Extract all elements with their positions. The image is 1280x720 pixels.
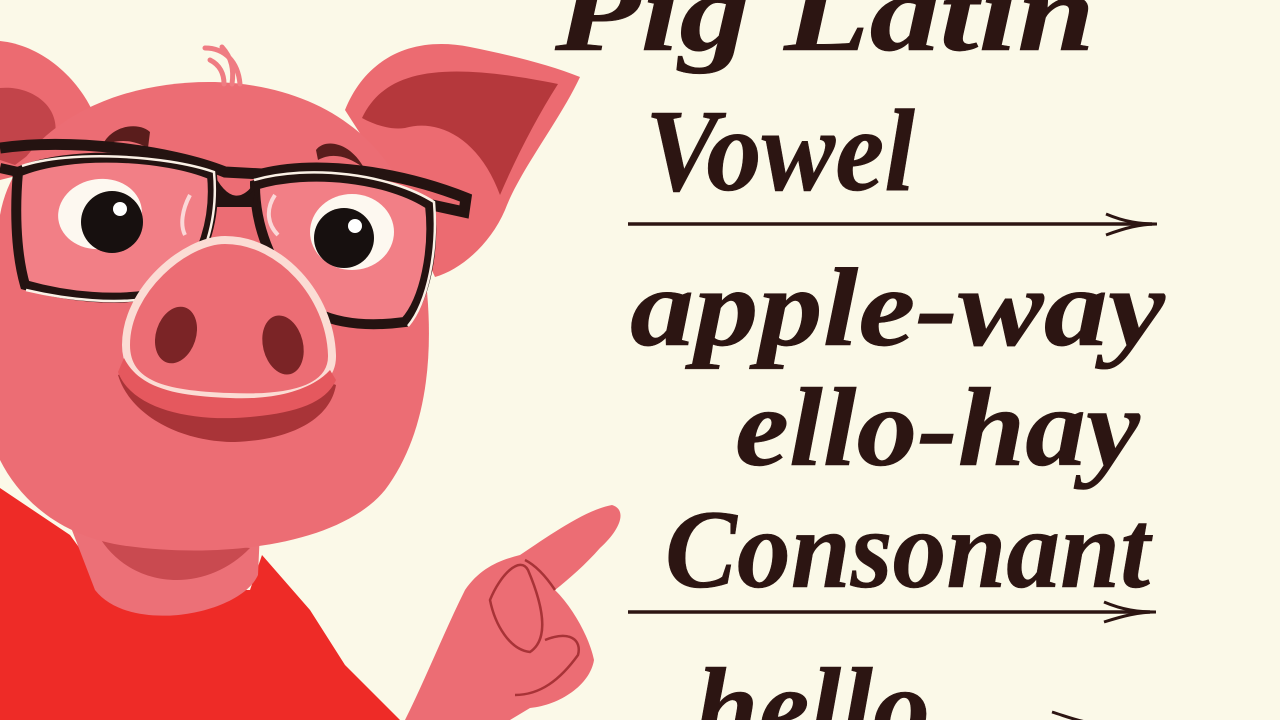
hair tuft: [205, 47, 240, 84]
arrow: hello result: [1052, 712, 1086, 720]
glasses frame: [0, 144, 466, 326]
eyebrows: [102, 126, 150, 148]
left ear: [0, 41, 92, 180]
pointing hand: [405, 505, 621, 720]
pig character: [0, 41, 621, 720]
red shirt: [0, 488, 400, 720]
label: vowel: Vowel: [645, 85, 915, 216]
head: [0, 82, 429, 550]
example: apple-way: apple-way: [630, 246, 1166, 370]
glasses lenses: [16, 158, 431, 324]
neck: [70, 525, 260, 616]
label: consonant: Consonant: [665, 488, 1153, 612]
eyes: [54, 173, 394, 270]
arrow: consonant rule: [628, 602, 1156, 622]
arrow: vowel rule: [628, 214, 1157, 235]
example: ello-hay: ello-hay: [735, 366, 1141, 490]
right ear: [345, 44, 580, 277]
snout: [118, 240, 336, 442]
